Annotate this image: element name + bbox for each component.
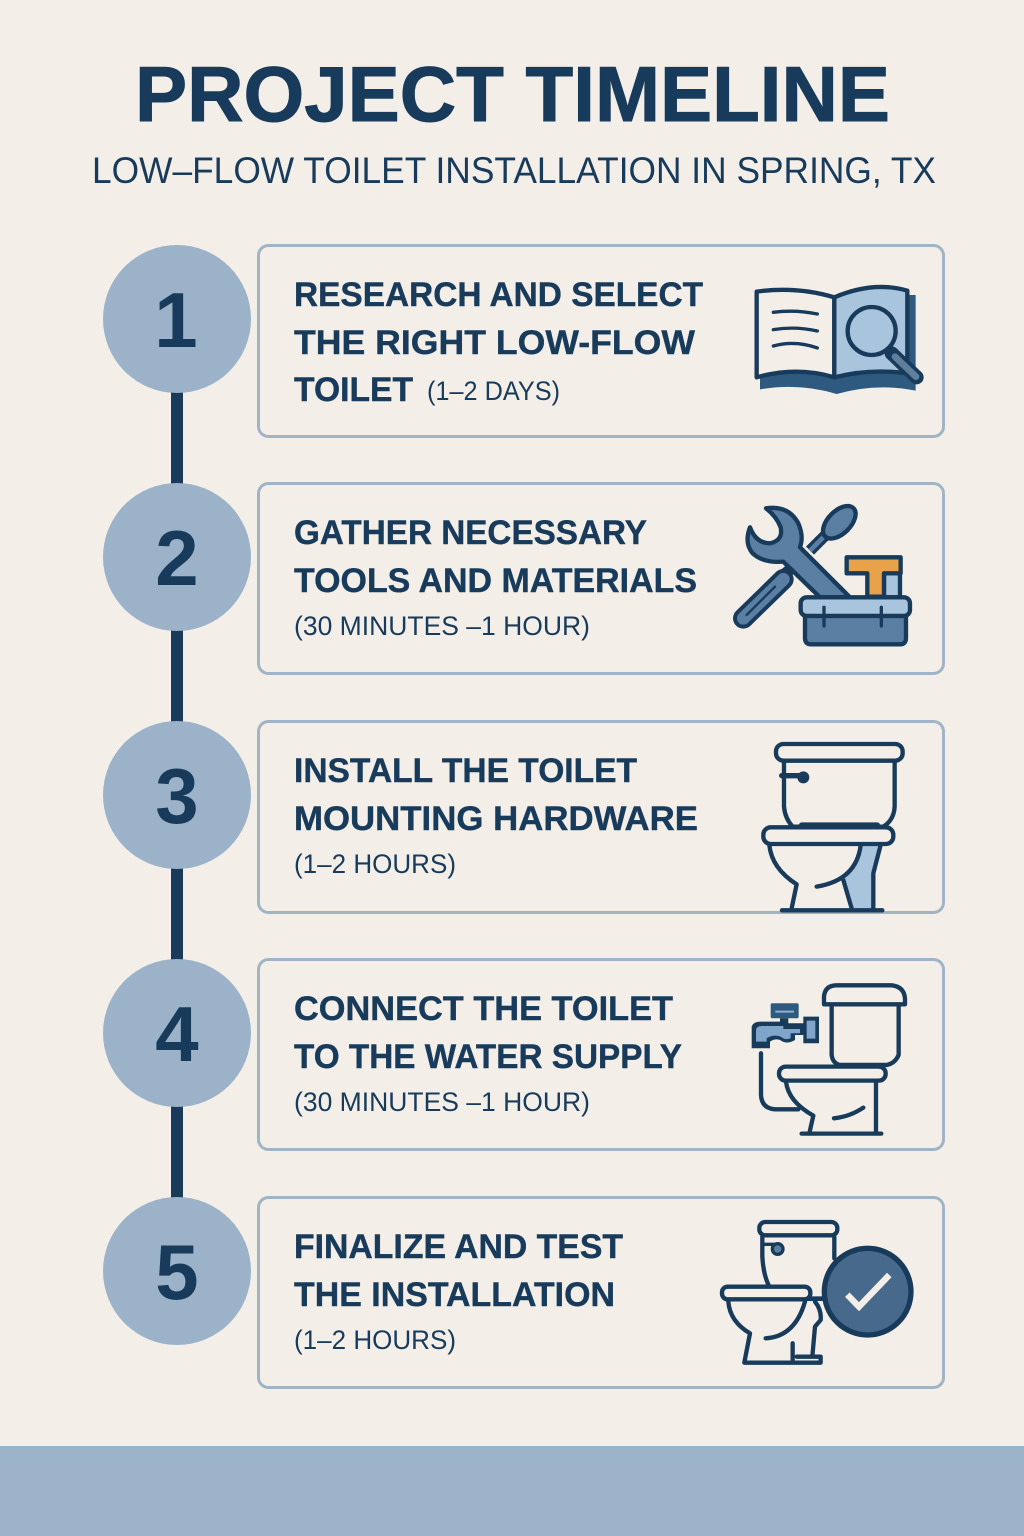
step 4 number badge	[103, 959, 251, 1107]
step 2 number badge	[103, 483, 251, 631]
step 1 card	[258, 246, 944, 436]
icon: wrench, screwdriver and toolbox	[743, 500, 910, 644]
step 1 number badge	[103, 245, 251, 393]
step 5 card	[258, 1198, 944, 1388]
step 1 text: TOILET	[294, 371, 413, 409]
step 4 text	[294, 990, 682, 1117]
step 2 number badge: 2	[155, 514, 199, 602]
step 2 text	[294, 514, 697, 641]
step 4 text: CONNECT THE TOILET	[294, 990, 673, 1028]
step 5 number badge: 5	[155, 1228, 199, 1316]
step 1 text: RESEARCH AND SELECT	[294, 276, 703, 314]
step 1 text: THE RIGHT LOW-FLOW	[294, 324, 696, 362]
step 4 number badge: 4	[155, 990, 199, 1078]
step 3 number badge	[103, 721, 251, 869]
step 2 card	[258, 484, 944, 674]
step 5 text	[294, 1228, 623, 1355]
step 3 text: INSTALL THE TOILET	[294, 752, 637, 790]
step 4	[103, 959, 944, 1150]
step 1 text: (1–2 DAYS)	[427, 376, 560, 406]
step 3	[103, 721, 944, 912]
icon: open book with magnifying glass	[757, 287, 917, 394]
step 4 text: (30 MINUTES –1 HOUR)	[294, 1087, 590, 1117]
step 2 text: TOOLS AND MATERIALS	[294, 562, 697, 600]
step 5 text: THE INSTALLATION	[294, 1276, 615, 1314]
step 5 number badge	[103, 1197, 251, 1345]
step 3 text: MOUNTING HARDWARE	[294, 800, 698, 838]
step 3 text: (1–2 HOURS)	[294, 849, 456, 879]
step 2	[103, 483, 944, 674]
timeline connector lines	[171, 390, 183, 1200]
step 4 card	[258, 960, 944, 1150]
icon: toilet	[763, 744, 903, 910]
step 3 text	[294, 752, 698, 879]
step 5	[103, 1197, 944, 1388]
step 2 text: (30 MINUTES –1 HOUR)	[294, 611, 590, 641]
step 4 text: TO THE WATER SUPPLY	[294, 1038, 682, 1076]
step 2 text: GATHER NECESSARY	[294, 514, 647, 552]
step 5 text: FINALIZE AND TEST	[294, 1228, 623, 1266]
step 1	[103, 245, 944, 436]
step 1 number badge: 1	[154, 276, 198, 364]
icon: toilet with check mark badge	[722, 1222, 911, 1363]
subtitle: LOW–FLOW TOILET INSTALLATION IN SPRING, TX	[92, 150, 936, 191]
step 3 number badge: 3	[155, 752, 199, 840]
title: PROJECT TIMELINE	[135, 50, 890, 138]
step 5 text: (1–2 HOURS)	[294, 1325, 456, 1355]
step 1 text	[294, 276, 703, 409]
step 3 card	[258, 722, 944, 912]
footer band	[0, 1446, 1024, 1536]
icon: toilet with water supply tap	[752, 985, 905, 1134]
